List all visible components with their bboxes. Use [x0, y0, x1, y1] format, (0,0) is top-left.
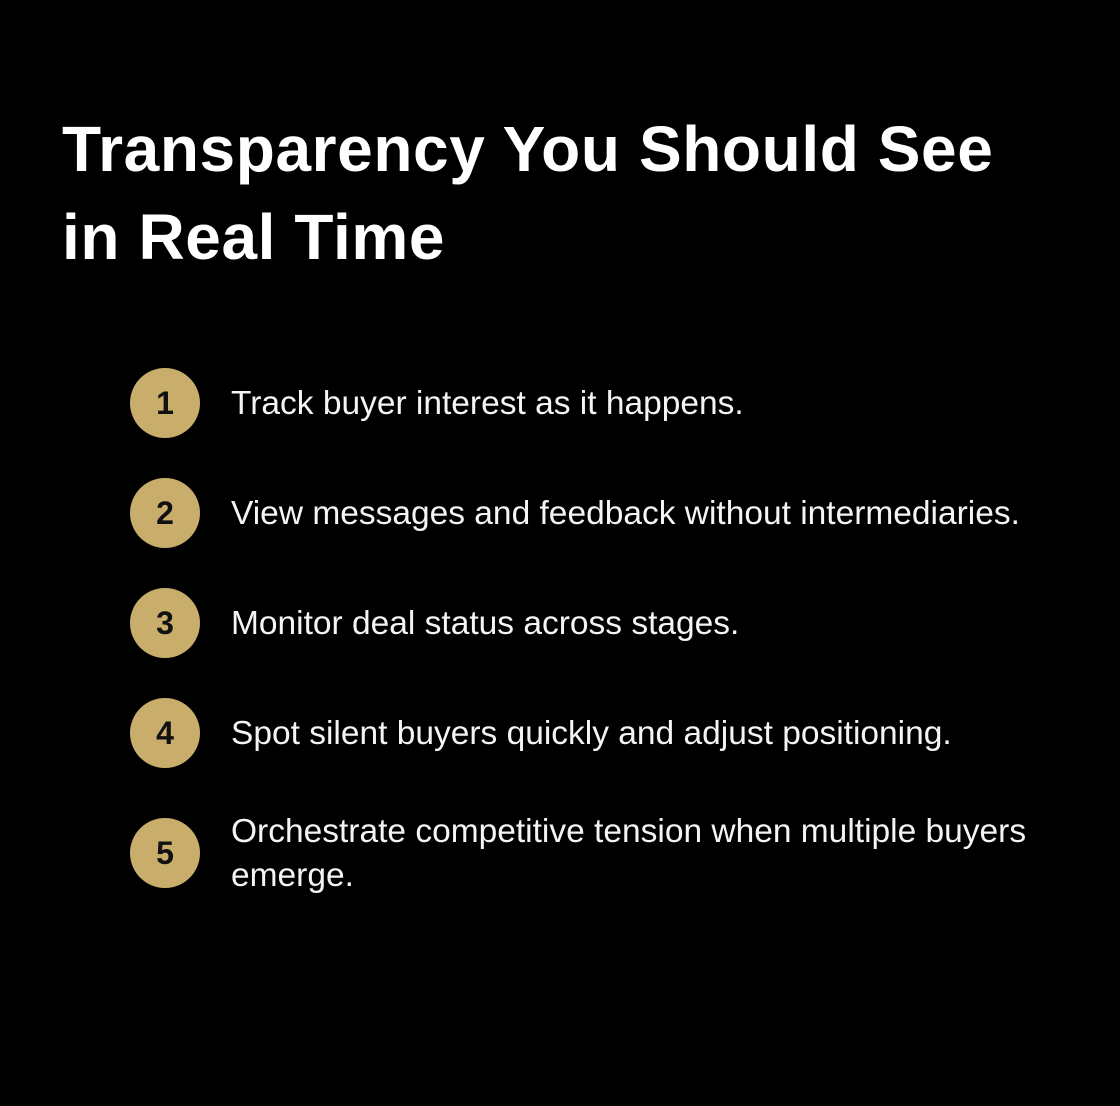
- title: Transparency You Should See: [62, 113, 993, 185]
- icon: number 2: [130, 478, 200, 548]
- icon: number 2: 2: [156, 495, 174, 531]
- icon: number 3: 3: [156, 605, 174, 641]
- icon: number 4: 4: [156, 715, 174, 751]
- title: [62, 113, 993, 273]
- text 5: emerge.: [231, 857, 354, 894]
- text 1: Track buyer interest as it happens.: [231, 385, 744, 422]
- icon: number 5: 5: [156, 835, 174, 871]
- icon: number 1: [130, 368, 200, 438]
- icon: number 1: 1: [156, 385, 174, 421]
- item 2: [130, 478, 1020, 548]
- text 2: View messages and feedback without intermediaries.: [231, 495, 1020, 532]
- title: in Real Time: [62, 201, 445, 273]
- text 4: Spot silent buyers quickly and adjust positioning.: [231, 715, 952, 752]
- icon: number 3: [130, 588, 200, 658]
- icon: number 5: [130, 818, 200, 888]
- item 5: [130, 813, 1026, 894]
- item 1: [130, 368, 744, 438]
- text 5: [231, 813, 1026, 894]
- icon: number 4: [130, 698, 200, 768]
- text 5: Orchestrate competitive tension when multiple buyers: [231, 813, 1026, 850]
- text 3: Monitor deal status across stages.: [231, 605, 739, 642]
- item 4: [130, 698, 952, 768]
- item 3: [130, 588, 739, 658]
